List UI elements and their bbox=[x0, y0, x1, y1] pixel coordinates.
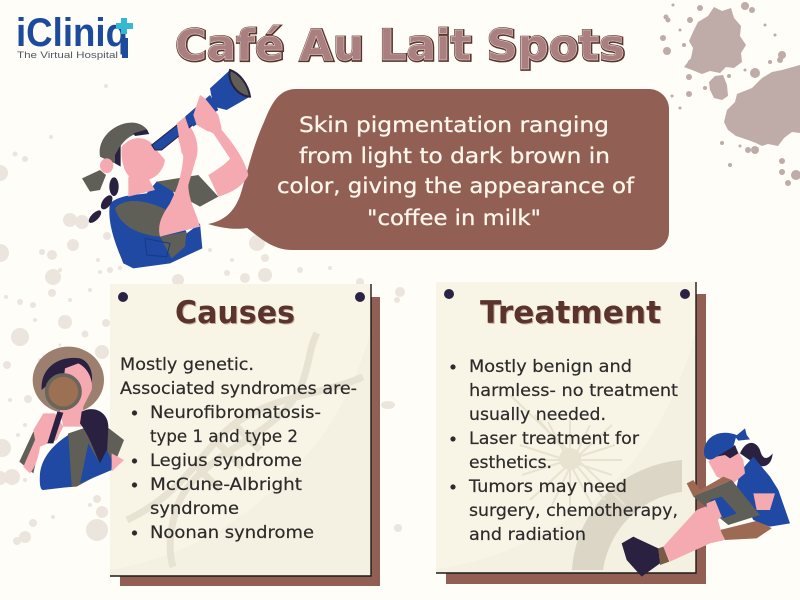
treatment text: usually needed. bbox=[469, 405, 606, 425]
icon: explorer with telescope bbox=[82, 70, 250, 268]
treatment text bbox=[450, 357, 678, 545]
causes text: type 1 and type 2 bbox=[150, 427, 298, 447]
causes text bbox=[120, 355, 357, 543]
bubble text: Skin pigmentation ranging bbox=[299, 113, 609, 137]
treatment text: esthetics. bbox=[469, 453, 552, 473]
treatment text: harmless- no treatment bbox=[469, 381, 678, 401]
causes text: Mostly genetic. bbox=[120, 355, 254, 375]
logo: iCliniq: iCliniq bbox=[16, 11, 128, 55]
arc watermark bbox=[572, 460, 682, 570]
splatter: top right bbox=[660, 2, 800, 186]
causes text: McCune-Albright bbox=[150, 475, 302, 495]
bubble text bbox=[277, 113, 635, 230]
treatment text: surgery, chemotherapy, bbox=[469, 501, 678, 521]
causes text: Legius syndrome bbox=[150, 451, 302, 471]
causes heading: Causes bbox=[175, 295, 295, 331]
causes text: Noonan syndrome bbox=[150, 523, 314, 543]
icon: explorer reading a book bbox=[622, 428, 790, 577]
splatter: left and centre bbox=[0, 84, 405, 545]
causes text: syndrome bbox=[150, 499, 239, 519]
panel: causes bbox=[110, 284, 380, 586]
sunburst watermark bbox=[510, 395, 625, 515]
causes text: Neurofibromatosis- bbox=[150, 403, 321, 423]
bubble text: from light to dark brown in bbox=[299, 144, 610, 168]
pins bbox=[118, 292, 128, 302]
panel: treatment bbox=[436, 282, 706, 584]
bubble text: "coffee in milk" bbox=[367, 206, 541, 230]
speech bubble bbox=[208, 89, 669, 250]
icon: explorer with magnifying glass bbox=[19, 347, 124, 490]
logo q descender bbox=[122, 38, 128, 58]
treatment text: and radiation bbox=[469, 525, 586, 545]
title fill: Café Au Lait Spots bbox=[175, 21, 625, 71]
logo tagline: The Virtual Hospital bbox=[17, 50, 118, 61]
corner swoosh bbox=[436, 330, 696, 573]
treatment text: Mostly benign and bbox=[469, 357, 632, 377]
pins bbox=[444, 289, 454, 299]
causes text: Associated syndromes are- bbox=[120, 379, 357, 399]
bubble text: color, giving the appearance of bbox=[277, 174, 635, 198]
logo plus sign bbox=[116, 18, 133, 34]
treatment heading: Treatment bbox=[480, 295, 661, 331]
title: Café Au Lait Spots bbox=[176, 22, 626, 72]
treatment text: Tumors may need bbox=[468, 477, 627, 497]
treatment text: Laser treatment for bbox=[469, 429, 639, 449]
dna watermark bbox=[127, 333, 363, 567]
